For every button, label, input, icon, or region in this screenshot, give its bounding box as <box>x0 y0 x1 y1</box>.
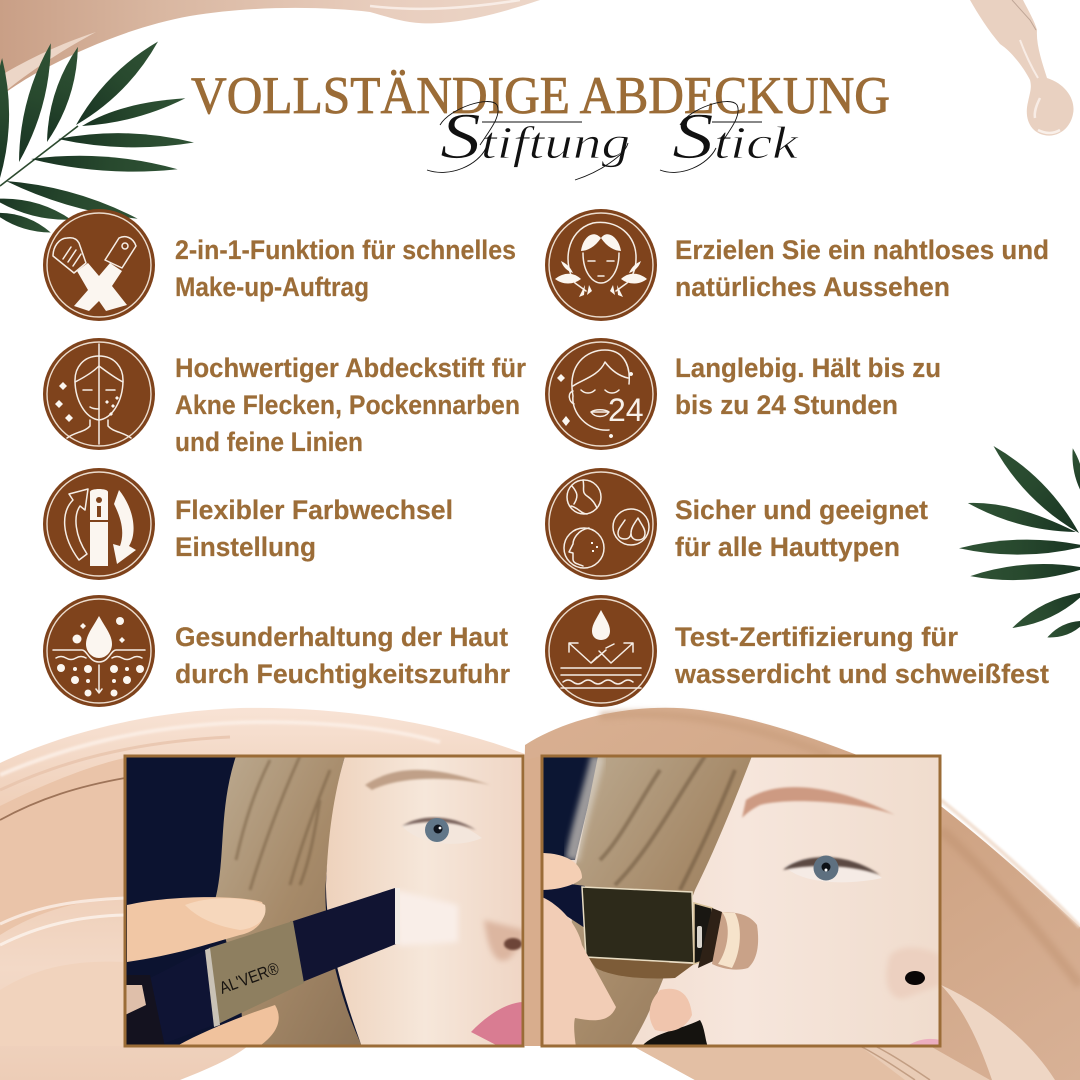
feature: long lasting <box>545 338 941 450</box>
text: wasserdicht und schweißfest <box>674 659 1049 689</box>
icon: face with 24 <box>545 338 657 450</box>
photo frame: left <box>125 756 523 1046</box>
feature: color change <box>43 468 453 580</box>
text: natürliches Aussehen <box>675 272 950 302</box>
icon: drop repelled by layers <box>545 595 657 707</box>
palm leaves: top left <box>0 36 194 237</box>
foundation smear: bottom left light <box>0 708 541 1080</box>
title: VOLLSTÄNDIGE ABDECKUNG <box>191 67 890 125</box>
text <box>175 622 510 689</box>
feature: 2-in-1 <box>43 209 516 321</box>
script flourishes <box>427 102 762 180</box>
photo: applying stick on cheek: AL'VER® <box>217 959 282 998</box>
icon: face with 24: 24 <box>608 392 644 428</box>
foundation smear: bottom right tan <box>520 708 1080 1080</box>
text: Flexibler Farbwechsel <box>175 495 453 525</box>
text: und feine Linien <box>175 427 363 457</box>
text: Erzielen Sie ein nahtloses und <box>675 235 1049 265</box>
feature: seamless look <box>545 209 1049 321</box>
feature: all skin types <box>545 468 928 580</box>
text: Langlebig. Hält bis zu <box>675 353 941 383</box>
icon: three skin circles <box>545 468 657 580</box>
text <box>675 235 1049 302</box>
feature: concealer stick <box>43 338 526 457</box>
text <box>175 235 516 302</box>
text: Akne Flecken, Pockennarben <box>175 390 520 420</box>
subtitle script: Stiftung Stick: Stick <box>672 100 800 173</box>
text <box>675 495 928 562</box>
text <box>175 495 453 562</box>
text: Einstellung <box>175 532 316 562</box>
text <box>675 353 941 420</box>
text: Sicher und geeignet <box>675 495 928 525</box>
text: für alle Hauttypen <box>675 532 900 562</box>
text: Test-Zertifizierung für <box>675 622 958 652</box>
subtitle script: Stiftung Stick: Stiftung <box>440 100 630 173</box>
photo: applying brush on cheek <box>541 755 941 1047</box>
text: bis zu 24 Stunden <box>675 390 898 420</box>
text <box>674 622 1049 689</box>
text <box>175 353 526 457</box>
text: Hochwertiger Abdeckstift für <box>175 353 526 383</box>
text: Make-up-Auftrag <box>175 272 369 302</box>
text: durch Feuchtigkeitszufuhr <box>175 659 510 689</box>
icon: split face <box>43 338 155 450</box>
icon: woman with leaves <box>545 209 657 321</box>
text: Gesunderhaltung der Haut <box>175 622 508 652</box>
icon: drop on skin <box>43 595 155 707</box>
subtitle script: Stiftung Stick <box>440 100 800 173</box>
foundation smear: top <box>0 0 540 96</box>
feature: waterproof <box>545 595 1049 707</box>
foundation drip: top right <box>970 0 1074 136</box>
photo frame: right <box>542 756 940 1046</box>
feature: hydration <box>43 595 510 707</box>
palm leaves: right <box>959 440 1080 642</box>
photo: applying stick on cheek <box>124 755 524 1047</box>
text: 2-in-1-Funktion für schnelles <box>175 235 516 265</box>
icon: brush and stick crossed <box>43 209 155 321</box>
icon: stick with rotation arrows <box>43 468 155 580</box>
